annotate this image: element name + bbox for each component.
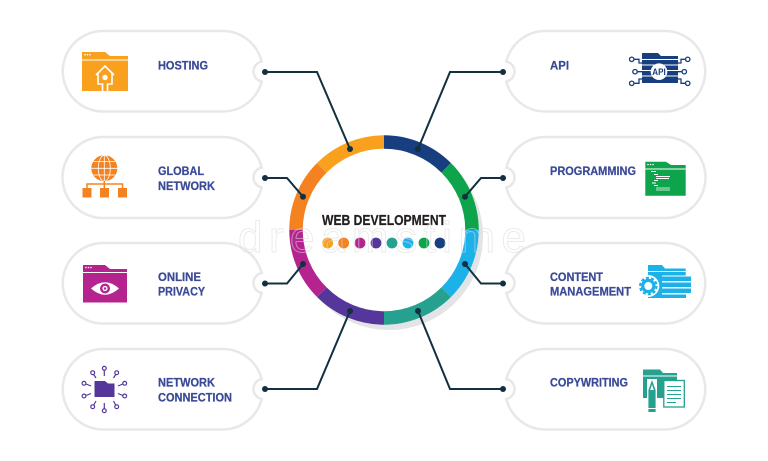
panel: hosting xyxy=(63,31,262,112)
label: network connection: CONNECTION xyxy=(158,391,232,405)
label: online privacy xyxy=(158,270,205,299)
panel: global network xyxy=(62,137,262,218)
label: api: API xyxy=(550,58,569,72)
icon: eye folder xyxy=(83,265,127,302)
label: content management xyxy=(550,270,632,299)
ring shadow xyxy=(295,142,483,330)
label: hosting: HOSTING xyxy=(158,58,208,72)
icon: network folder xyxy=(82,366,127,413)
label: online privacy: ONLINE xyxy=(158,270,201,284)
label: network connection xyxy=(158,376,232,405)
icon: copywriting folder xyxy=(643,370,684,413)
panel: content management xyxy=(506,243,705,324)
watermark: dreamstime xyxy=(238,213,526,262)
icon: api folder xyxy=(630,53,690,86)
icon: globe network xyxy=(82,155,127,198)
label: copywriting: COPYWRITING xyxy=(550,376,628,390)
panel: online privacy xyxy=(63,243,262,324)
label: content management: MANAGEMENT xyxy=(550,285,632,299)
panel: copywriting xyxy=(506,349,705,430)
icon: content gear folder xyxy=(637,265,692,300)
connector dots xyxy=(262,69,506,392)
icon: code folder xyxy=(645,162,686,196)
ring xyxy=(290,136,478,324)
label: content management: CONTENT xyxy=(550,270,604,284)
panel: api xyxy=(506,31,705,112)
panel: programming xyxy=(506,137,706,218)
label: network connection: NETWORK xyxy=(158,376,215,390)
label: online privacy: PRIVACY xyxy=(158,285,205,299)
label: global network xyxy=(158,164,215,193)
connector lines xyxy=(265,72,503,389)
icon: hosting folder xyxy=(82,52,128,91)
label: global network: GLOBAL xyxy=(158,164,204,178)
label: programming: PROGRAMMING xyxy=(550,164,636,178)
colour dots row xyxy=(322,238,445,248)
label: global network: NETWORK xyxy=(158,179,215,193)
panel: network connection xyxy=(63,349,262,430)
icon: api folder: API xyxy=(652,67,666,77)
title: WEB DEVELOPMENT xyxy=(322,213,446,229)
